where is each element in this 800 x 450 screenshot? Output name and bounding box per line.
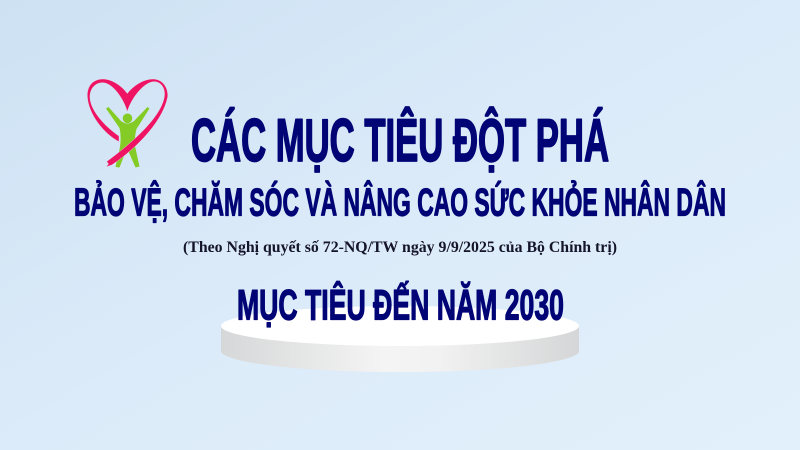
icon: green figure xyxy=(106,107,150,168)
logo: heart ribbon with figure xyxy=(87,79,168,168)
source note: (Theo Nghị quyết số 72-NQ/TW ngày 9/9/2025 của Bộ Chính trị) xyxy=(183,239,617,256)
podium xyxy=(221,306,579,372)
icon: pink heart ribbon xyxy=(87,79,168,167)
podium side xyxy=(221,326,579,372)
heading: targets to 2030: MỤC TIÊU ĐẾN NĂM 2030 xyxy=(237,280,564,330)
podium top xyxy=(221,306,579,346)
